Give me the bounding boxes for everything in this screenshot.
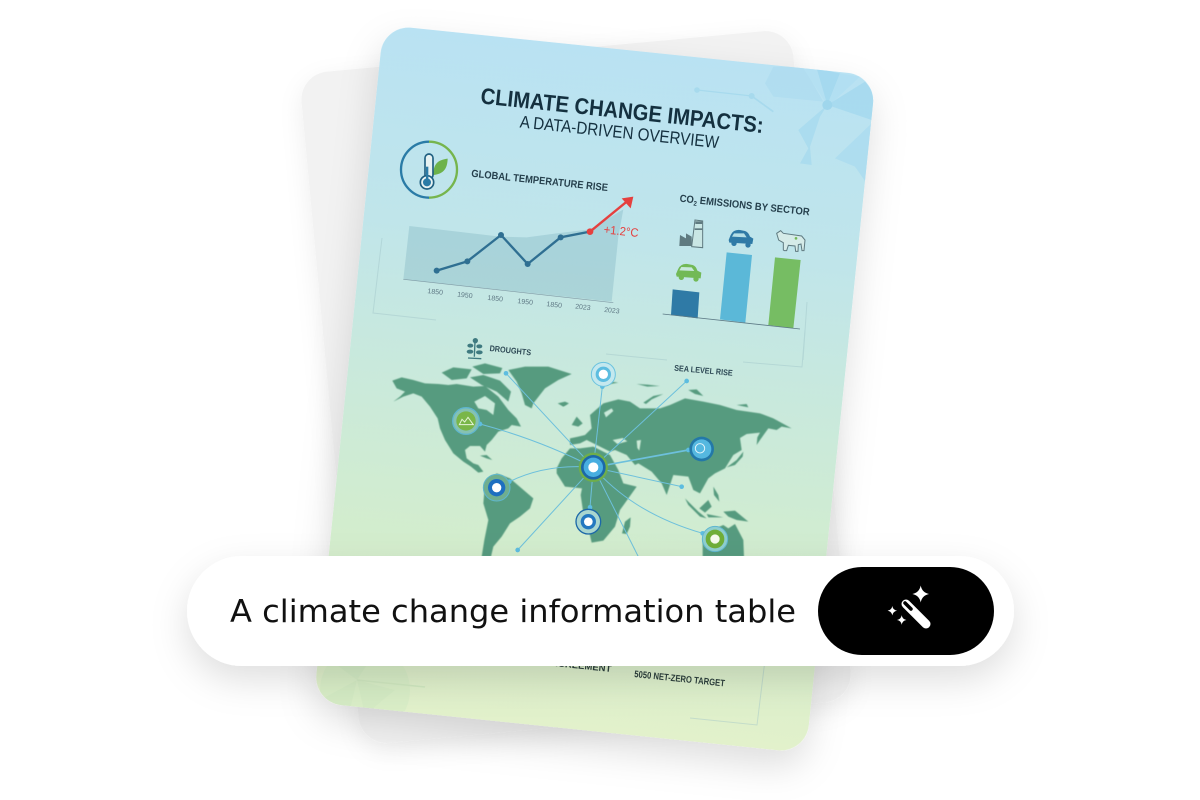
marker: southern africa (576, 509, 601, 534)
decoration: pinwheel top right (694, 67, 877, 183)
axis years: 1850 (546, 301, 562, 310)
generate button (818, 567, 994, 655)
decoration: pinwheel bottom left (322, 666, 425, 708)
prompt text: A climate change information table (230, 594, 796, 630)
heading: global temperature rise: GLOBAL TEMPERATURE RISE (471, 169, 609, 194)
world map: eurasia africa australia (557, 380, 792, 557)
icon: magic wand (888, 586, 929, 625)
title: CLIMATE CHANGE IMPACTS: (479, 82, 765, 138)
top section in zoom coordinates (401, 82, 811, 359)
subtitle: A DATA-DRIVEN OVERVIEW (519, 111, 720, 152)
icon: green car (676, 264, 701, 282)
heading: CO2 emissions: EMISSIONS BY SECTOR (697, 196, 811, 218)
arrow: red rise (587, 197, 633, 235)
faint connector decorations (373, 238, 807, 725)
line chart: temperature (403, 197, 640, 315)
icon: blue car (729, 230, 753, 248)
heading: CO2 emissions: 2 (693, 201, 697, 208)
world map: americas and greenland (392, 363, 572, 557)
axis years: 1850 (487, 295, 503, 303)
connector end dots (478, 371, 705, 552)
marker: central africa (579, 453, 608, 482)
marker: north america (453, 408, 479, 434)
map overlays in zoom coordinates (453, 362, 734, 557)
label: Paris agreement: 2015 PARIS AGREEMENT (496, 652, 612, 675)
prompt pill (187, 556, 1014, 666)
marker: asia (689, 437, 714, 461)
label: sea level rise: SEA LEVEL RISE (674, 363, 734, 378)
heading: CO2 emissions: CO (679, 194, 696, 206)
back card (299, 29, 853, 745)
axis years: 2023 (575, 304, 591, 312)
main infographic card (314, 25, 877, 753)
axis years (427, 288, 620, 315)
label: net-zero target: 5050 NET-ZERO TARGET (634, 669, 725, 690)
icon: cow (777, 231, 805, 251)
bar chart: emissions (663, 220, 805, 329)
icon: drought plant (467, 339, 482, 359)
marker: arctic (591, 362, 615, 386)
axis years: 2023 (604, 307, 620, 315)
icon: thermometer with leaf (401, 142, 457, 198)
marker: australia (702, 526, 728, 552)
axis years: 1950 (517, 298, 533, 307)
marker: south america (483, 474, 510, 501)
callout: +1.2C: +1.2°C (603, 222, 640, 240)
connector lines (480, 373, 703, 557)
axis years: 1850 (427, 288, 443, 297)
icon: factory (679, 220, 703, 248)
label: droughts: DROUGHTS (489, 343, 532, 357)
axis years: 1950 (457, 292, 473, 300)
